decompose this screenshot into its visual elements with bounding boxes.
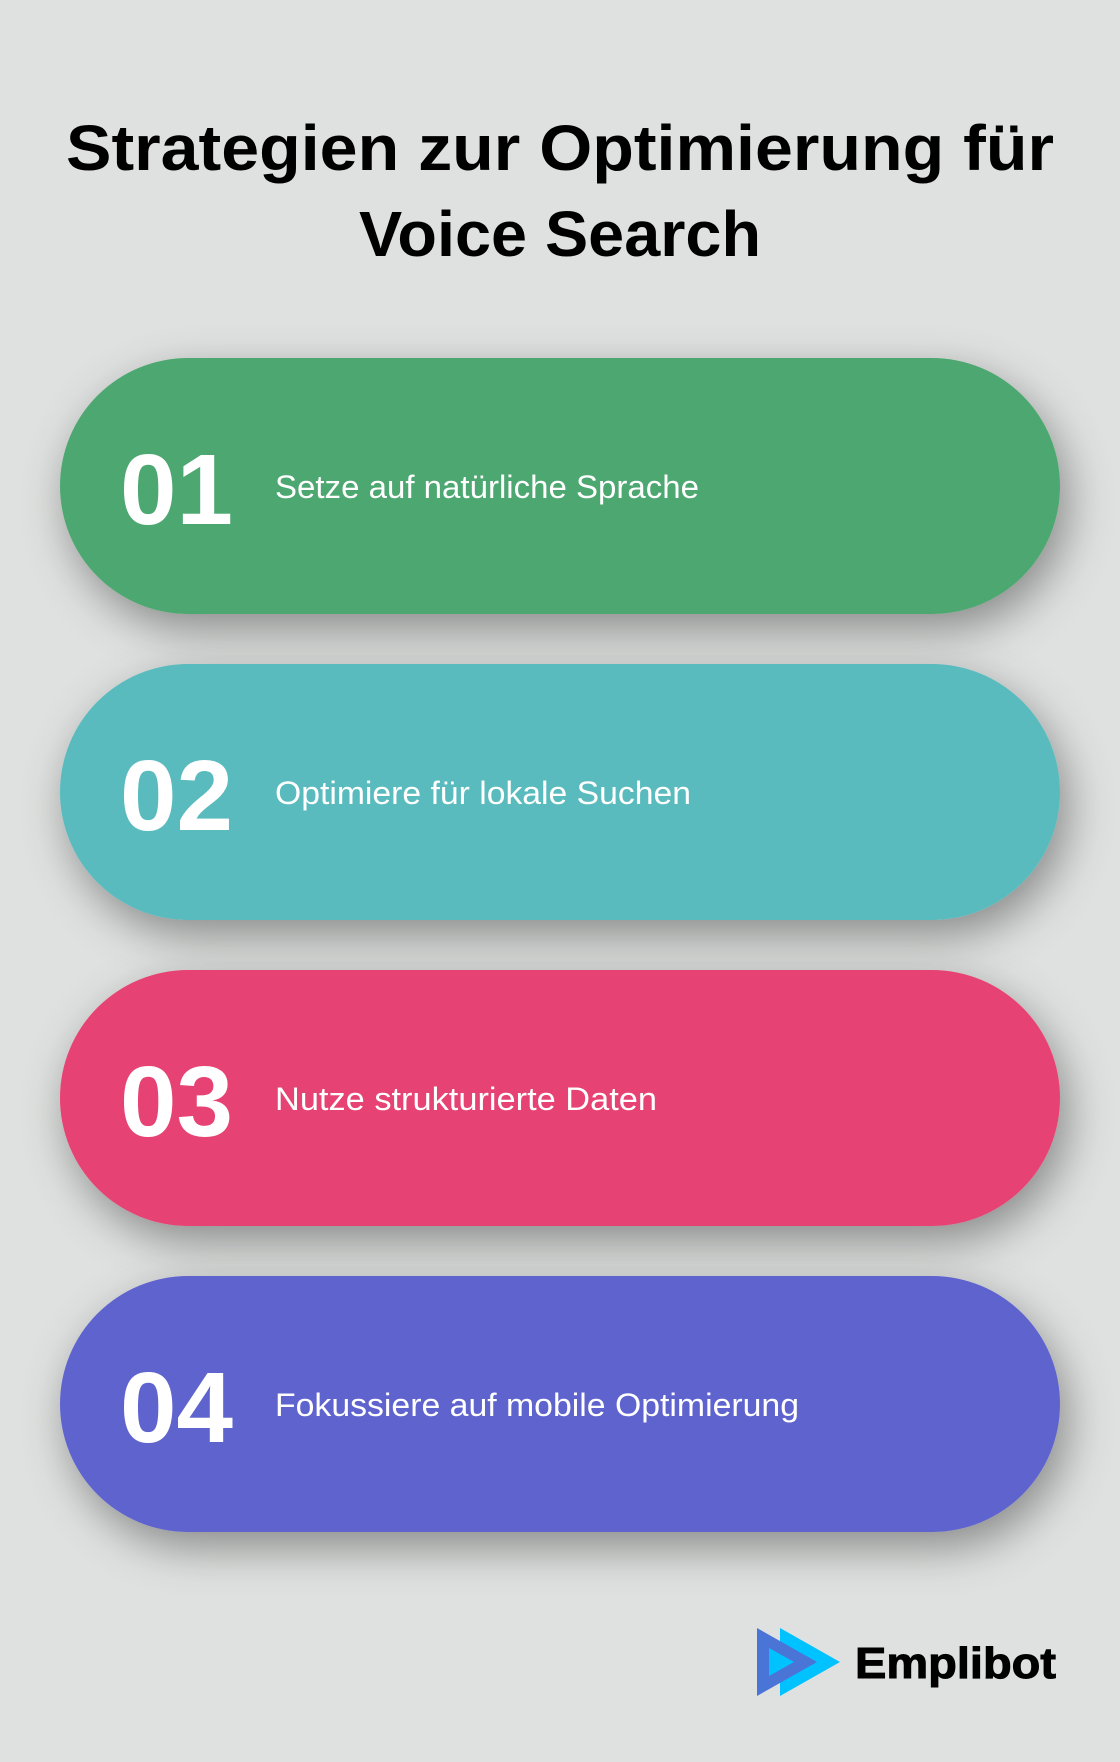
step number 04: 04 [120,1352,233,1464]
logo wordmark: Emplibot [855,1639,1056,1688]
logo: Emplibot [757,1628,1056,1696]
title [66,112,1054,270]
step label 04: Fokussiere auf mobile Optimierung [275,1387,799,1423]
step label 02: Optimiere für lokale Suchen [275,775,691,811]
panel: step 04 [60,1276,1060,1532]
panel: step 01 [60,358,1060,614]
panel: step 03 [60,970,1060,1226]
title: Strategien zur Optimierung für [66,112,1054,184]
step label 01: Setze auf natürliche Sprache [275,469,699,505]
step number 02: 02 [120,740,233,852]
step label 03: Nutze strukturierte Daten [275,1081,657,1117]
step number 03: 03 [120,1046,233,1158]
title: Voice Search [359,198,761,270]
step number 01: 01 [120,434,233,546]
panel: step 02 [60,664,1060,920]
icon: play triangles [757,1628,840,1696]
